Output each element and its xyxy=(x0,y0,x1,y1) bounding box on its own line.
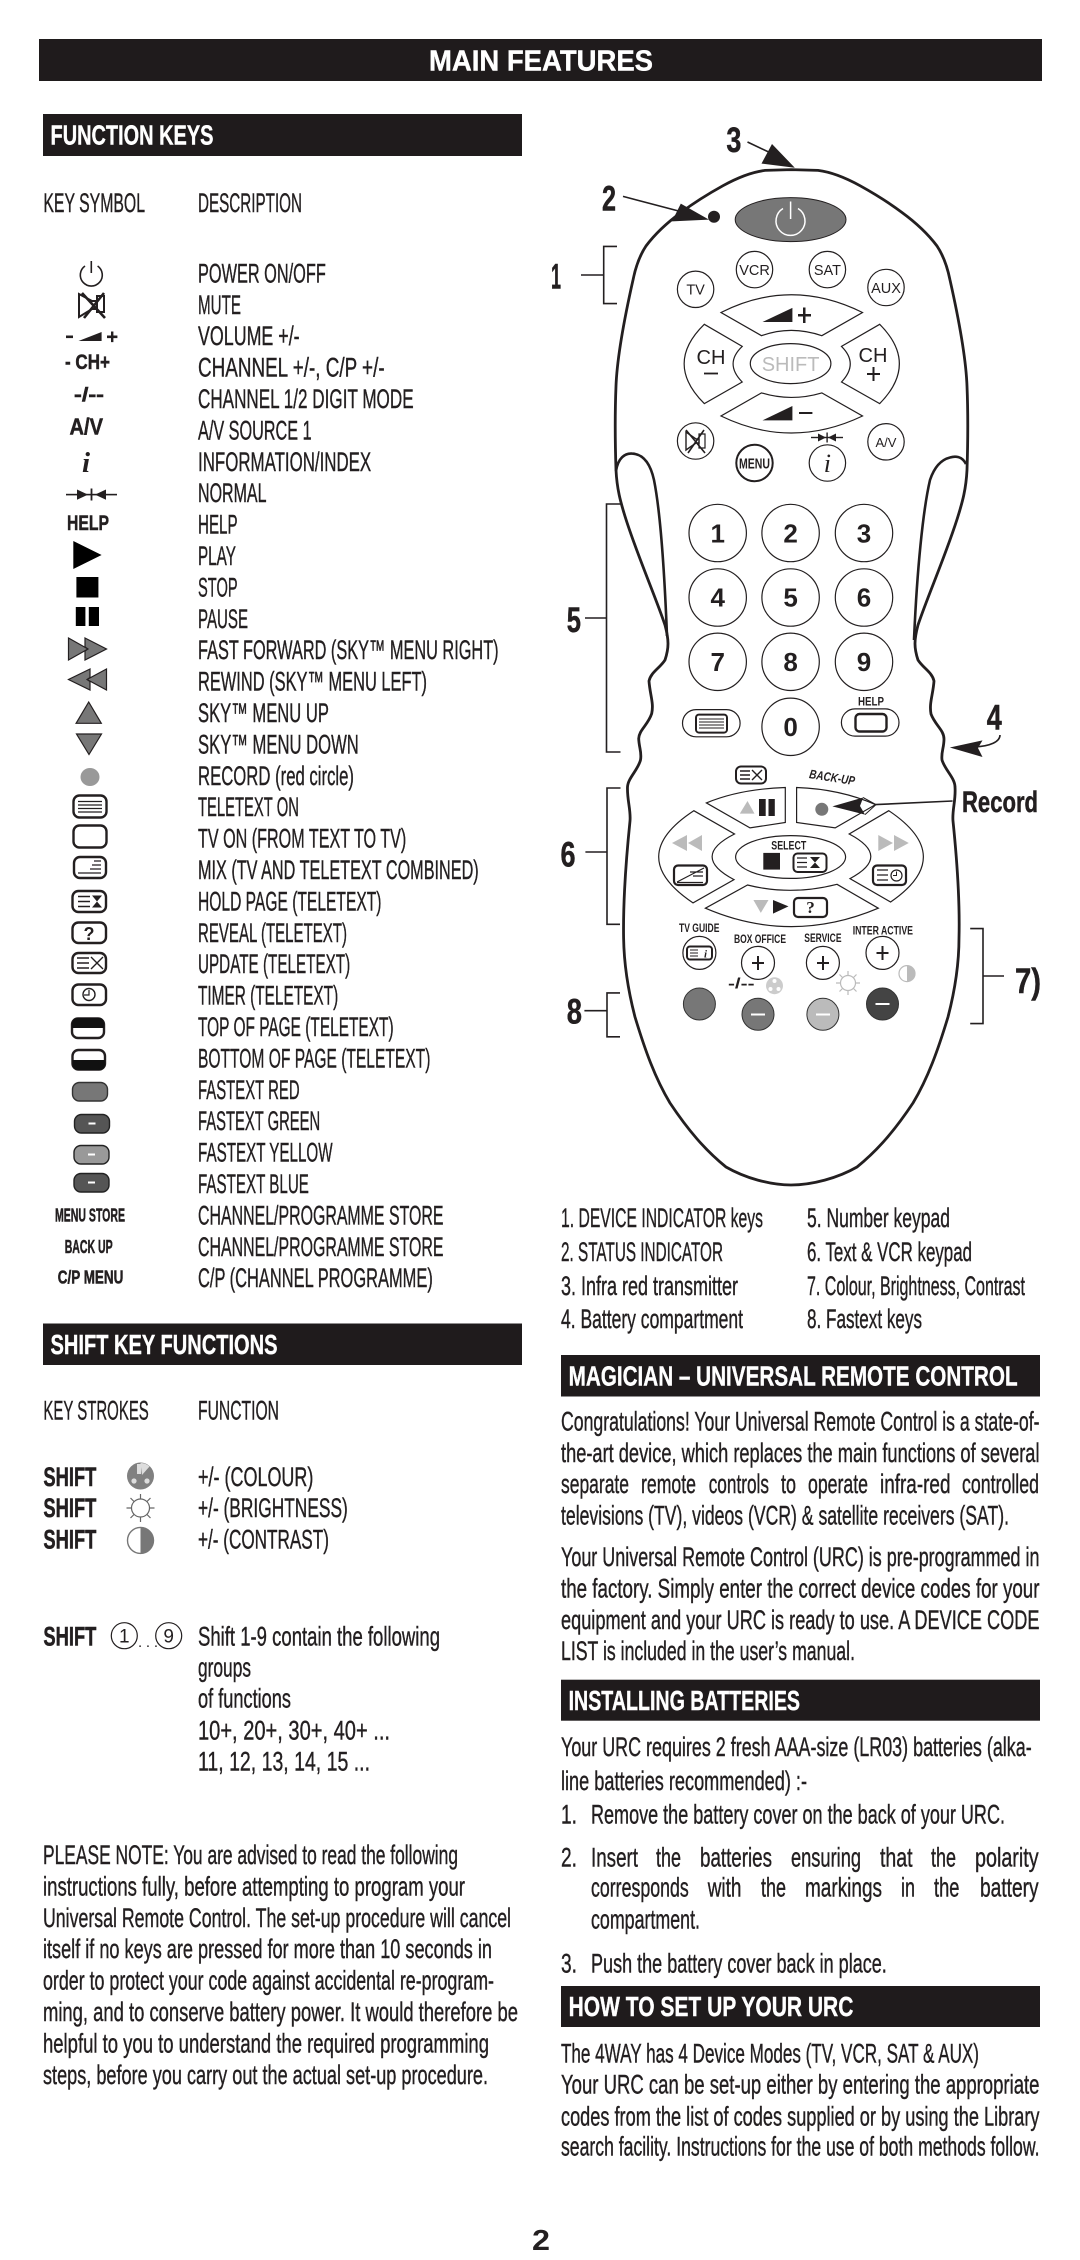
play and reveal key: ? xyxy=(806,898,815,917)
step 2: ensuring xyxy=(791,1842,861,1872)
label: tv guide: TV GUIDE xyxy=(679,921,719,935)
legend: remote control parts: 4. Battery compartment xyxy=(561,1304,743,1334)
legend: remote control parts: 3. Infra red transmitter xyxy=(561,1271,738,1301)
device button: tv xyxy=(677,271,714,307)
description: top of page: TOP OF PAGE (TELETEXT) xyxy=(198,1012,394,1042)
key 6 xyxy=(835,569,893,626)
legend: remote control parts: 8. Fastext keys xyxy=(807,1304,922,1334)
shift label: contrast: SHIFT xyxy=(43,1524,97,1554)
description: back up: CHANNEL/PROGRAMME STORE xyxy=(198,1232,444,1262)
description: fastext green: FASTEXT GREEN xyxy=(198,1106,320,1136)
a/v button xyxy=(868,424,904,460)
tv guide button: i xyxy=(704,948,708,960)
description: record: RECORD (red circle) xyxy=(198,761,354,791)
description: timer: TIMER (TELETEXT) xyxy=(198,981,338,1011)
icon: colour symbol xyxy=(766,977,783,994)
normal symbol xyxy=(811,432,843,442)
icon: mix xyxy=(74,857,106,878)
panel: magician universal remote control xyxy=(561,1355,1040,1666)
icon: fastext yellow xyxy=(74,1146,109,1164)
status indicator led xyxy=(708,211,720,223)
text block: congratulations: separate xyxy=(561,1469,629,1499)
select key: SELECT xyxy=(771,838,807,852)
device button: sat xyxy=(809,251,846,288)
callout 5: number keypad xyxy=(567,504,620,752)
power button xyxy=(735,198,846,242)
description: update: UPDATE (TELETEXT) xyxy=(198,949,350,979)
step 2: the xyxy=(931,1842,956,1872)
step 2: 2. xyxy=(561,1842,577,1872)
text: brightness: +/- (BRIGHTNESS) xyxy=(198,1493,348,1523)
description: fastext blue: FASTEXT BLUE xyxy=(198,1169,309,1199)
callout 2: status indicator xyxy=(602,180,709,221)
step 2: polarity xyxy=(975,1842,1039,1872)
menu button: MENU xyxy=(739,456,770,472)
icon: play xyxy=(73,541,102,569)
label: inter active: INTER ACTIVE xyxy=(853,923,913,937)
legend: remote control parts: 2. STATUS INDICATOR xyxy=(561,1237,723,1267)
text block: please note: PLEASE NOTE: You are advised to read the following xyxy=(43,1840,458,1870)
step 2: the xyxy=(656,1842,681,1872)
icon: stop xyxy=(76,577,98,598)
text block: congratulations: operate xyxy=(808,1469,868,1499)
key 8: 8 xyxy=(783,647,798,677)
column header: key symbol: KEY SYMBOL xyxy=(43,188,145,218)
number keypad xyxy=(689,504,893,756)
description: tv on: TV ON (FROM TEXT TO TV) xyxy=(198,824,406,854)
callout 1: device indicator keys: 1 xyxy=(551,258,561,297)
icon: brightness symbol xyxy=(836,971,860,995)
text block: please note: steps, before you carry out the actual set-up procedure. xyxy=(43,2060,488,2090)
step 3: 3. xyxy=(561,1948,577,1978)
icon: mute xyxy=(79,293,105,318)
plus button: contrast xyxy=(866,936,899,969)
key 1: 1 xyxy=(710,518,725,548)
text block: congratulations: infra-red xyxy=(880,1469,950,1499)
text block: congratulations: controlled xyxy=(962,1469,1039,1499)
column header: key strokes: KEY STROKES xyxy=(43,1396,149,1426)
icon: volume xyxy=(66,332,117,342)
icon: contrast xyxy=(128,1527,154,1553)
text: shift 1-9 description: of functions xyxy=(198,1684,291,1714)
callout 6: text and vcr keypad xyxy=(560,788,620,924)
key 3: 3 xyxy=(857,518,871,548)
channel down key: CH xyxy=(697,347,725,369)
description: a/v: A/V SOURCE 1 xyxy=(198,415,312,445)
description: hold: HOLD PAGE (TELETEXT) xyxy=(198,886,382,916)
icon: reveal: ? xyxy=(84,924,94,944)
description: play: PLAY xyxy=(198,541,236,571)
info button: i xyxy=(824,449,831,478)
shift label: brightness: SHIFT xyxy=(43,1493,97,1523)
callout 4: battery compartment xyxy=(950,699,1002,757)
text block: congratulations: to xyxy=(781,1469,796,1499)
column header: description: DESCRIPTION xyxy=(198,188,302,218)
callout 8: fastext keys: 8 xyxy=(567,993,582,1032)
step 2: that xyxy=(880,1842,913,1872)
heading: installing batteries: INSTALLING BATTERIES xyxy=(569,1685,800,1716)
text block: congratulations: remote xyxy=(641,1469,696,1499)
callout 3: infra red transmitter xyxy=(726,121,795,168)
icon: sky menu down xyxy=(76,734,102,754)
icon: digit mode: -/-- xyxy=(74,385,104,406)
step 2: markings xyxy=(805,1873,882,1903)
icon: teletext on xyxy=(74,796,106,818)
callout 3: infra red transmitter: 3 xyxy=(726,121,741,160)
icon: fast forward xyxy=(68,638,106,660)
description: stop: STOP xyxy=(198,572,238,602)
mute button xyxy=(677,423,714,459)
step 2: in xyxy=(901,1873,915,1903)
shift key xyxy=(750,344,831,384)
diagram: remote control xyxy=(551,121,1041,1185)
key 5 xyxy=(762,569,819,626)
description: normal: NORMAL xyxy=(198,478,266,508)
icon: top of page xyxy=(72,1018,104,1038)
channel up key xyxy=(842,324,899,404)
panel: installing batteries xyxy=(561,1680,1040,1978)
icon: menu store: MENU STORE xyxy=(55,1206,125,1226)
fastext button: yellow xyxy=(807,998,839,1030)
back-up label: BACK-UP xyxy=(808,767,856,788)
description: fastext yellow: FASTEXT YELLOW xyxy=(198,1138,333,1168)
legend: remote control parts: 6. Text & VCR keypad xyxy=(807,1237,972,1267)
step 2: the xyxy=(934,1873,959,1903)
text block: congratulations: controls xyxy=(709,1469,769,1499)
text block: please note: order to protect your code against accidental re-program- xyxy=(43,1966,494,1996)
step 2: battery xyxy=(980,1873,1039,1903)
legend: remote control parts: 1. DEVICE INDICATOR keys xyxy=(561,1203,763,1233)
text block: please note: ming, and to conserve battery power. It would therefore be xyxy=(43,1997,518,2027)
icon: information: i xyxy=(82,447,90,479)
description: help: HELP xyxy=(198,510,238,540)
column header: function: FUNCTION xyxy=(198,1396,279,1426)
description: mute: MUTE xyxy=(198,290,241,320)
key 7 xyxy=(689,633,746,690)
teletext pill key xyxy=(682,710,740,737)
key 6: 6 xyxy=(857,582,871,612)
text block: congratulations xyxy=(561,1406,1040,1531)
shift key: SHIFT xyxy=(762,354,819,376)
key 8 xyxy=(762,633,819,690)
key 9 xyxy=(835,633,893,690)
description: digit mode: CHANNEL 1/2 DIGIT MODE xyxy=(198,384,414,414)
icon: tv on xyxy=(74,826,106,848)
fastext button: red xyxy=(683,988,715,1020)
tv guide button xyxy=(683,936,716,969)
description: teletext on: TELETEXT ON xyxy=(198,792,299,822)
help pill key xyxy=(841,695,899,736)
icon: keys 1 to 9: ... xyxy=(138,1634,158,1651)
key 3 xyxy=(835,504,893,562)
description: sky menu down: SKY™ MENU DOWN xyxy=(198,729,359,759)
callout 7: colour brightness contrast xyxy=(970,929,1041,1024)
channel up key: CH xyxy=(859,345,887,367)
text: shift 1-9 description xyxy=(198,1621,440,1777)
icon: hold xyxy=(72,891,106,912)
icon: update xyxy=(72,953,106,973)
text: shift 1-9 description: Shift 1-9 contain the following xyxy=(198,1621,440,1651)
device button: vcr xyxy=(736,251,773,288)
shift label: 1 to 9: SHIFT xyxy=(43,1621,97,1651)
title bar: main features xyxy=(39,39,1042,81)
text block: device modes xyxy=(561,2039,1040,2162)
step 1: 1. xyxy=(561,1799,577,1829)
icon: fastext green xyxy=(74,1114,110,1133)
callout 5: number keypad: 5 xyxy=(567,601,581,640)
description: information: INFORMATION/INDEX xyxy=(198,447,371,477)
key 0: 0 xyxy=(783,712,798,742)
icon: channel: - CH+ xyxy=(65,351,110,374)
description: reveal: REVEAL (TELETEXT) xyxy=(198,918,347,948)
step 2: Insert xyxy=(591,1842,638,1872)
update key icon xyxy=(736,766,766,784)
description: power: POWER ON/OFF xyxy=(198,258,326,288)
key 7: 7 xyxy=(710,647,725,677)
plus button: brightness xyxy=(806,946,839,979)
callout 1: device indicator keys xyxy=(551,246,617,304)
plus button: colour xyxy=(742,946,774,979)
device button: tv: TV xyxy=(686,282,705,298)
icon: fastext red xyxy=(72,1082,108,1101)
icon: keys 1 to 9: 1 xyxy=(119,1626,130,1648)
heading: function keys: FUNCTION KEYS xyxy=(50,120,214,150)
text block: please note xyxy=(43,1840,518,2090)
icon: brightness xyxy=(126,1494,154,1522)
icon: power xyxy=(80,261,102,286)
callout 7: colour brightness contrast: 7) xyxy=(1015,962,1041,1001)
icon: contrast symbol xyxy=(899,966,915,982)
description: fastext red: FASTEXT RED xyxy=(198,1075,300,1105)
label: service: SERVICE xyxy=(804,931,842,945)
key 4 xyxy=(689,569,746,626)
legend: remote control parts xyxy=(561,1203,1025,1334)
key 0 xyxy=(762,698,819,756)
description: mix: MIX (TV AND TELETEXT COMBINED) xyxy=(198,855,479,885)
fast forward key xyxy=(849,811,923,902)
record key xyxy=(797,788,876,828)
callout 4: battery compartment: 4 xyxy=(987,699,1002,738)
description: fast forward: FAST FORWARD (SKY™ MENU RIGHT) xyxy=(198,635,499,665)
step 3: Push the battery cover back in place. xyxy=(591,1948,887,1978)
channel down key xyxy=(684,324,742,404)
icon: a/v: A/V xyxy=(70,414,104,440)
callout 6: text and vcr keypad: 6 xyxy=(560,835,576,874)
icon: keys 1 to 9 xyxy=(111,1623,182,1651)
description: bottom of page: BOTTOM OF PAGE (TELETEXT) xyxy=(198,1043,430,1073)
step 3 xyxy=(561,1948,887,1978)
icon: record xyxy=(80,768,100,786)
text block: pre-programmed: LIST is included in the user’s manual. xyxy=(561,1636,855,1666)
description: c/p: C/P (CHANNEL PROGRAMME) xyxy=(198,1263,433,1293)
icon: normal xyxy=(66,488,117,500)
panel: function keys xyxy=(43,114,522,1293)
heading: installing batteries xyxy=(561,1680,1040,1721)
text: contrast: +/- (CONTRAST) xyxy=(198,1524,329,1554)
step 2: batteries xyxy=(700,1842,772,1872)
title bar: main features: MAIN FEATURES xyxy=(429,46,653,78)
description: volume: VOLUME +/- xyxy=(198,321,300,351)
icon: fastext blue xyxy=(74,1174,109,1192)
text: colour: +/- (COLOUR) xyxy=(198,1462,313,1492)
callout 2: status indicator: 2 xyxy=(602,180,616,219)
menu button xyxy=(736,445,773,481)
play and reveal key xyxy=(705,884,878,927)
fastext button: green xyxy=(742,998,774,1030)
volume down key xyxy=(721,393,862,433)
heading: magician xyxy=(561,1355,1040,1396)
heading: shift key functions: SHIFT KEY FUNCTIONS xyxy=(50,1329,278,1360)
step 2: compartment. xyxy=(591,1904,700,1934)
icon: rewind xyxy=(68,669,106,690)
description: pause: PAUSE xyxy=(198,604,248,634)
shift label: colour: SHIFT xyxy=(43,1462,97,1492)
text block: please note: itself if no keys are pressed for more than 10 seconds in xyxy=(43,1934,492,1964)
rewind key xyxy=(659,811,734,903)
icon: sky menu up xyxy=(76,702,101,723)
text block: please note: helpful to you to understand the required programming xyxy=(43,2028,489,2058)
text block: please note: instructions fully, before attempting to program your xyxy=(43,1871,465,1901)
heading: function keys xyxy=(43,114,522,156)
step 2: with xyxy=(707,1873,741,1903)
key 2: 2 xyxy=(783,518,798,548)
text block: please note: Universal Remote Control. The set-up procedure will cancel xyxy=(43,1903,511,1933)
key 9: 9 xyxy=(857,647,871,677)
help pill key: HELP xyxy=(858,695,884,709)
panel: how to set up your urc xyxy=(561,1986,1040,2162)
device button: aux: AUX xyxy=(871,281,901,297)
icon: reveal xyxy=(72,922,106,944)
icon: colour xyxy=(127,1462,154,1490)
text: shift 1-9 description: groups xyxy=(198,1652,251,1682)
remote body outline xyxy=(615,170,968,1185)
icon: help: HELP xyxy=(67,512,109,535)
fastext button: blue xyxy=(866,988,898,1020)
step 2: the xyxy=(761,1873,786,1903)
icon: back up: BACK UP xyxy=(65,1237,113,1257)
page number: 2 xyxy=(532,2225,550,2257)
text block: batteries intro xyxy=(561,1732,1032,1796)
panel: shift key functions xyxy=(43,1324,522,1777)
key 1 xyxy=(689,504,746,562)
icon: bottom of page xyxy=(72,1050,105,1070)
callout 8: fastext keys xyxy=(567,993,620,1037)
side grips xyxy=(616,454,966,640)
icon: timer xyxy=(72,984,106,1005)
label: box office: BOX OFFICE xyxy=(734,932,786,946)
heading: how to set up: HOW TO SET UP YOUR URC xyxy=(569,1991,853,2022)
legend: remote control parts: 5. Number keypad xyxy=(807,1203,950,1233)
digit mode label: -/-- xyxy=(728,976,755,993)
description: menu store: CHANNEL/PROGRAMME STORE xyxy=(198,1200,444,1230)
callout: record xyxy=(832,786,1038,819)
key 2 xyxy=(762,504,819,562)
icon: pause xyxy=(76,607,99,626)
text: shift 1-9 description: 11, 12, 13, 14, 15 ... xyxy=(198,1747,370,1777)
description: sky menu up: SKY™ MENU UP xyxy=(198,698,329,728)
description: channel: CHANNEL +/-, C/P +/- xyxy=(198,353,385,383)
callout: record: Record xyxy=(962,786,1038,819)
icon: c/p menu: C/P MENU xyxy=(58,1268,123,1288)
text: shift 1-9 description: 10+, 20+, 30+, 40+ ... xyxy=(198,1716,390,1746)
a/v button: A/V xyxy=(876,435,897,450)
pause key xyxy=(706,788,785,828)
key 5: 5 xyxy=(783,582,798,612)
device button: sat: SAT xyxy=(814,263,841,279)
text block: batteries intro: line batteries recommended) :- xyxy=(561,1766,807,1796)
heading: how to set up xyxy=(561,1986,1040,2027)
volume up key xyxy=(721,295,862,336)
step 2: corresponds xyxy=(591,1873,689,1903)
step 2 xyxy=(561,1842,1039,1934)
device button: aux xyxy=(868,269,904,306)
info button xyxy=(809,445,846,481)
device button: vcr: VCR xyxy=(739,263,770,279)
select key xyxy=(736,836,846,878)
key 4: 4 xyxy=(710,582,725,612)
heading: shift key functions xyxy=(43,1324,522,1365)
text block: pre-programmed xyxy=(561,1542,1040,1666)
description: rewind: REWIND (SKY™ MENU LEFT) xyxy=(198,667,427,697)
icon: keys 1 to 9: 9 xyxy=(163,1626,174,1648)
